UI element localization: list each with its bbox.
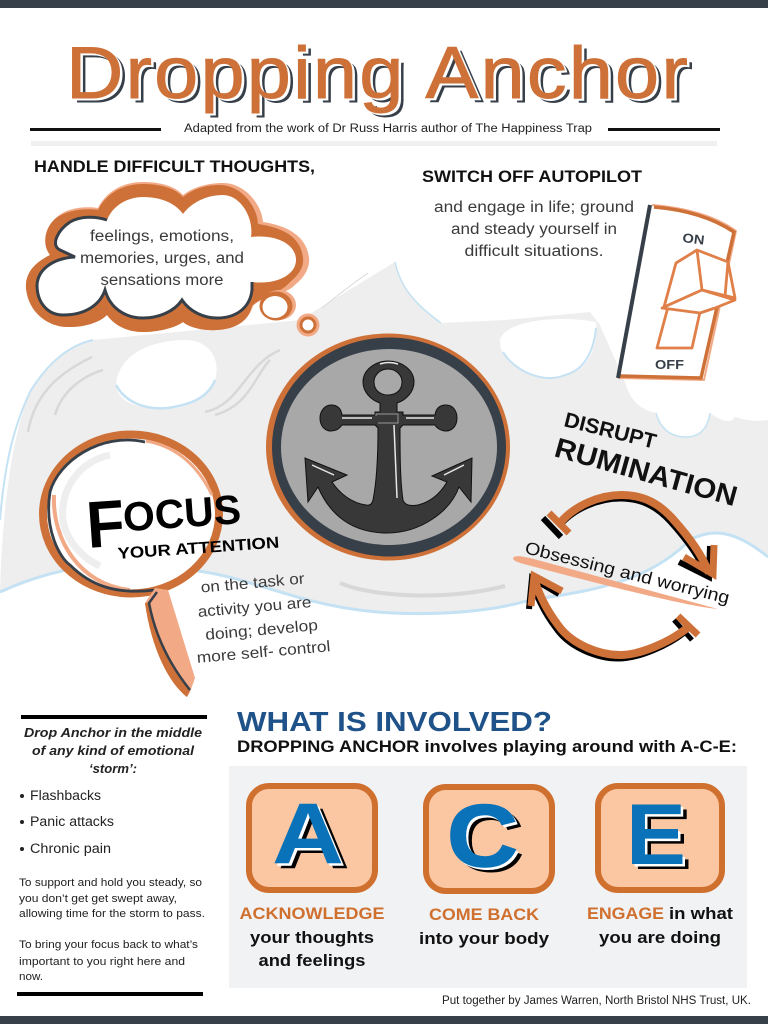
support text: important to you right here and [19, 956, 185, 968]
tile C: C [450, 788, 520, 888]
autopilot text: and engage in life; ground [434, 199, 634, 216]
support text: you don’t get get swept away, [19, 893, 177, 905]
thought cloud [26, 182, 309, 332]
engage label: ENGAGE [587, 904, 664, 923]
magnifier handle [145, 588, 195, 697]
icon: light switch [618, 205, 736, 380]
bottom bar [0, 1016, 768, 1024]
subtitle with rules: Adapted from the work of Dr Russ Harris author of The Happiness Trap [184, 123, 592, 135]
background storm cloud [0, 262, 768, 614]
acknowledge label: your thoughts [250, 928, 374, 947]
engage label: you are doing [599, 928, 721, 947]
icon: light switch: ON [682, 230, 705, 248]
divider line [513, 556, 718, 609]
panel: drop anchor storm list [17, 715, 207, 996]
heading: focus your attention: OCUS [121, 486, 242, 540]
storm intro: Drop Anchor in the middle [24, 725, 202, 740]
autopilot text: and steady yourself in [451, 221, 617, 238]
thought bubble ring large [260, 290, 296, 320]
acknowledge label [240, 904, 384, 970]
support text [19, 877, 205, 983]
panel: ACE [229, 766, 747, 988]
bullet list: Chronic pain [30, 841, 111, 856]
icon: anchor [305, 361, 472, 533]
support text: allowing time for the storm to pass. [19, 908, 205, 920]
focus text [196, 571, 331, 667]
tile C [426, 786, 552, 891]
tile E: E [632, 792, 692, 888]
come back label [419, 905, 550, 948]
focus text: on the task or [200, 571, 305, 597]
magnifying glass [43, 434, 219, 697]
cloud text: feelings, emotions, [90, 228, 234, 245]
arrow: bottom arc [529, 576, 698, 658]
support text: To bring your focus back to what’s [19, 939, 199, 951]
bullet list: Flashbacks [30, 788, 101, 803]
title: Dropping Anchor [68, 35, 692, 116]
thought bubble ring small [296, 314, 320, 336]
subtitle with rules [30, 123, 720, 146]
autopilot text [434, 199, 634, 260]
acknowledge label: ACKNOWLEDGE [240, 904, 384, 923]
heading: focus your attention: YOUR ATTENTION [117, 535, 280, 563]
bullet list: Panic attacks [30, 814, 114, 829]
storm intro: of any kind of emotional [32, 743, 194, 758]
tile A: A [278, 791, 350, 887]
come back label: into your body [419, 929, 550, 948]
heading: disrupt rumination: DISRUPT [562, 409, 659, 454]
top bar [0, 0, 768, 8]
cloud text: sensations more [100, 272, 224, 289]
tile C: C [453, 791, 524, 890]
heading: handle difficult thoughts: HANDLE DIFFICULT THOUGHTS, [34, 158, 315, 176]
tile E: E [626, 787, 686, 883]
title: Dropping Anchor [66, 33, 690, 114]
title: Dropping Anchor [71, 37, 695, 118]
support text: To support and hold you steady, so [19, 877, 202, 889]
focus text: doing; develop [205, 617, 319, 644]
tile A: A [274, 788, 346, 884]
storm intro [24, 725, 202, 776]
cloud text [80, 228, 244, 289]
icon: light switch: OFF [655, 358, 684, 372]
focus text: more self- control [196, 638, 331, 667]
heading: focus your attention [84, 475, 280, 565]
engage label: in what [669, 904, 733, 923]
rumination cycle arrows [529, 495, 714, 658]
cloud text: memories, urges, and [80, 250, 244, 267]
bullet list [20, 788, 114, 856]
heading: switch off autopilot: SWITCH OFF AUTOPILOT [422, 168, 642, 186]
arrow: top arc [543, 495, 714, 577]
tile A: A [272, 786, 344, 882]
heading: focus your attention: F [84, 485, 127, 562]
tile C: C [447, 786, 518, 885]
credit: Put together by James Warren, North Bristol NHS Trust, UK. [442, 995, 751, 1007]
come back label: COME BACK [429, 905, 540, 924]
autopilot text: difficult situations. [464, 243, 604, 260]
engage label [587, 904, 733, 947]
focus text: activity you are [197, 594, 312, 621]
anchor emblem [266, 334, 510, 560]
storm intro: ‘storm’: [89, 761, 137, 776]
heading: disrupt rumination: RUMINATION [551, 432, 741, 512]
tile A [249, 786, 375, 890]
subheading: DROPPING ANCHOR involves playing around with A-C-E: [237, 738, 737, 756]
tile E [598, 786, 722, 890]
support text: now. [19, 971, 43, 983]
acknowledge label: and feelings [258, 951, 366, 970]
heading: what is involved: WHAT IS INVOLVED? [237, 706, 552, 737]
obsessing label: Obsessing and worrying [523, 537, 732, 608]
tile E: E [628, 790, 688, 886]
